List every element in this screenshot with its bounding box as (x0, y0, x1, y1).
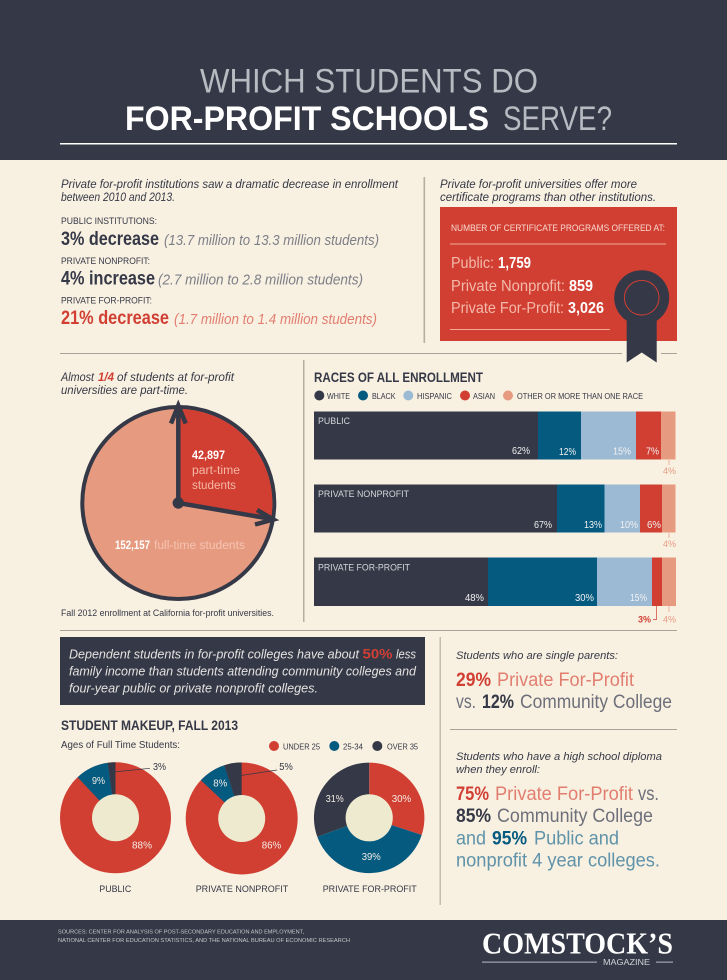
red certificate box: Private Nonprofit: (451, 278, 565, 295)
callout: dependent students: 50% (362, 646, 393, 662)
pie label: full-time: full-time students (154, 540, 245, 552)
races legend: OTHER OR MORE THAN ONE RACE (517, 391, 643, 401)
bar: private for-profit: 30% (575, 593, 594, 604)
donut: private nonprofit (186, 762, 298, 895)
diploma stat: Private For-Profit (495, 784, 634, 805)
bar: private nonprofit: 4% (663, 539, 677, 550)
bar: public: 7% (646, 446, 659, 458)
part-time intro text: 1/4 (98, 372, 115, 384)
races legend: HISPANIC (417, 391, 452, 401)
private nonprofit stat: (2.7 million to 2.8 million students) (158, 272, 363, 288)
pie chart (82, 406, 274, 599)
certificate intro text: certificate programs than other institutions. (440, 192, 656, 204)
private for-profit stat: PRIVATE FOR-PROFIT: (61, 296, 152, 306)
bar: private nonprofit: 10% (620, 520, 638, 531)
arrow: up (171, 406, 186, 503)
donut: public: 9% (92, 776, 105, 787)
bar: private for-profit: 4% (663, 614, 677, 626)
ages subheading: Ages of Full Time Students: (61, 740, 180, 751)
bar: private for-profit (314, 558, 677, 626)
red certificate box: NUMBER OF CERTIFICATE PROGRAMS OFFERED AT: (451, 223, 665, 234)
icon: award ribbon (614, 270, 669, 362)
panel: part-time students (60, 372, 274, 618)
sources (58, 930, 350, 944)
diploma intro (456, 751, 662, 776)
pie label: full-time (115, 540, 245, 552)
single parents stat: vs. (456, 692, 476, 713)
red certificate box: Private For-Profit: (451, 300, 564, 317)
donut: public: 88% (132, 840, 152, 852)
red certificate box: Public: (451, 255, 494, 272)
single parents stat: Private For-Profit (497, 670, 635, 691)
title: FOR-PROFIT SCHOOLS (125, 100, 489, 138)
private for-profit stat: (1.7 million to 1.4 million students) (174, 312, 377, 328)
single parents stat: 29% (456, 670, 491, 691)
races legend: BLACK (372, 391, 396, 401)
donut: private nonprofit: 86% (262, 840, 281, 852)
pie footnote: Fall 2012 enrollment at California for-profit universities. (61, 608, 274, 618)
races legend: ASIAN (473, 391, 495, 401)
bar: public: PUBLIC (318, 416, 350, 427)
callout: dependent students: family income than students attending community colleges and (69, 664, 417, 678)
red certificate box (440, 207, 677, 341)
callout: dependent students: Dependent students in for-profit colleges have about (69, 646, 360, 662)
diploma intro: when they enroll: (456, 764, 540, 776)
bar: public: 62% (512, 446, 530, 457)
title (125, 62, 612, 138)
certificate intro text (440, 179, 656, 204)
diploma stat: Community College (497, 806, 653, 827)
donut: private nonprofit: 5% (279, 762, 293, 773)
private for-profit stat: 21% decrease (61, 308, 169, 329)
pie label: full-time: 152,157 (115, 540, 150, 552)
panel: races of all enrollment (314, 369, 677, 626)
bar: private for-profit: PRIVATE FOR-PROFIT (318, 562, 410, 574)
single parents stat: Community College (520, 692, 672, 713)
races legend (314, 390, 643, 401)
red certificate box: 1,759 (498, 255, 531, 272)
callout: dependent students (60, 637, 425, 705)
ages legend: OVER 35 (387, 742, 418, 752)
red certificate box: 859 (569, 278, 593, 295)
public institutions stat (61, 216, 379, 250)
certificate intro text: Private for-profit universities offer more (440, 179, 637, 191)
title: WHICH STUDENTS DO (200, 62, 538, 100)
public institutions stat: 3% decrease (61, 229, 159, 250)
bar: private nonprofit: PRIVATE NONPROFIT (318, 489, 409, 500)
diploma stat: 95% (492, 828, 527, 850)
ages legend: UNDER 25 (283, 742, 320, 752)
diploma stat: 85% (456, 806, 491, 827)
bar: public: 4% (663, 466, 677, 477)
donut: private for-profit: 39% (362, 852, 381, 863)
panel: certificate programs (440, 179, 677, 362)
donut: private nonprofit: 8% (213, 778, 227, 790)
panel: high school diploma (456, 751, 662, 872)
panel: enrollment change (61, 179, 399, 329)
part-time intro text: universities are part-time. (61, 385, 188, 397)
red certificate box: 3,026 (568, 300, 604, 317)
pie label: part-time (192, 450, 240, 492)
sources: SOURCES: CENTER FOR ANALYSIS OF POST-SECONDARY EDUCATION AND EMPLOYMENT, (58, 930, 304, 936)
part-time intro text (60, 372, 235, 397)
pie label: part-time: 42,897 (192, 450, 225, 462)
bar: private nonprofit: 6% (647, 520, 661, 531)
diploma stat: Public and (534, 828, 619, 850)
callout: dependent students: four-year public or private nonprofit colleges. (69, 680, 318, 696)
private nonprofit stat: PRIVATE NONPROFIT: (61, 256, 150, 267)
private nonprofit stat: 4% increase (61, 268, 155, 290)
ages legend (269, 741, 418, 752)
public institutions stat: PUBLIC INSTITUTIONS: (61, 216, 157, 227)
bar: public: 15% (613, 446, 631, 458)
bar: private nonprofit: 67% (534, 520, 552, 531)
private for-profit stat (61, 296, 377, 329)
donut: public: 3% (153, 762, 166, 773)
bar: private for-profit: 15% (630, 593, 647, 604)
logo: MAGAZINE (603, 958, 650, 967)
enrollment intro text: between 2010 and 2013. (61, 192, 175, 204)
header band (0, 0, 727, 160)
bar: private for-profit: 48% (465, 593, 484, 604)
donut: public: PUBLIC (99, 884, 131, 895)
races heading: RACES OF ALL ENROLLMENT (314, 369, 483, 385)
diploma stat: vs. (638, 784, 659, 805)
single parents stat (456, 670, 672, 713)
panel: student makeup (60, 717, 424, 895)
private nonprofit stat (61, 256, 363, 290)
callout: dependent students: less (396, 646, 416, 662)
races legend: WHITE (327, 391, 350, 401)
bar: public (314, 412, 677, 477)
public institutions stat: (13.7 million to 13.3 million students) (164, 233, 379, 249)
diploma stat: 75% (456, 784, 489, 805)
logo: COMSTOCK’S (482, 926, 673, 960)
footer band (0, 920, 727, 980)
sources: NATIONAL CENTER FOR EDUCATION STATISTICS, AND THE NATIONAL BUREAU OF ECONOMIC RESEARCH (58, 938, 350, 944)
diploma intro: Students who have a high school diploma (456, 751, 662, 763)
makeup heading: STUDENT MAKEUP, FALL 2013 (61, 717, 238, 733)
part-time intro text: Almost (60, 372, 95, 384)
pie label: part-time: students (192, 480, 236, 492)
part-time intro text: of students at for-profit (117, 372, 235, 384)
bar: public: 12% (559, 447, 576, 458)
single parents stat: 12% (482, 692, 514, 713)
bar: private for-profit: 3% (638, 614, 652, 626)
pie label: part-time: part-time (192, 465, 240, 477)
donut: private for-profit: PRIVATE FOR-PROFIT (323, 884, 417, 895)
enrollment intro text: Private for-profit institutions saw a dramatic decrease in enrollment (61, 179, 399, 191)
bar: private nonprofit: 13% (584, 520, 602, 531)
diploma stat (456, 784, 660, 872)
title: SERVE? (503, 100, 612, 138)
ages legend: 25-34 (343, 742, 363, 752)
donut: public (60, 762, 171, 895)
bar: private nonprofit (314, 484, 677, 550)
diploma stat: and (456, 828, 486, 850)
diploma stat: nonprofit 4 year colleges. (456, 850, 660, 872)
donut: private for-profit: 30% (392, 794, 411, 805)
panel: single parents (456, 650, 672, 713)
donut: private for-profit: 31% (326, 794, 344, 805)
donut: private for-profit (314, 763, 424, 895)
donut: private nonprofit: PRIVATE NONPROFIT (196, 884, 288, 895)
enrollment intro text (61, 179, 399, 204)
arrow: right (178, 503, 274, 524)
single parents intro: Students who are single parents: (456, 650, 618, 662)
